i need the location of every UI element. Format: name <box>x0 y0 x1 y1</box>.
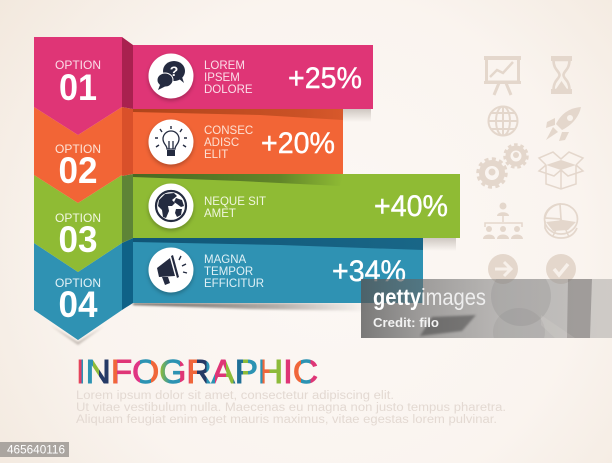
watermark credit: Credit: filo <box>373 316 439 330</box>
icon: globe <box>488 106 518 136</box>
bar 2 value: +20% <box>261 127 335 160</box>
bar 1 label: DOLORE <box>204 84 253 96</box>
option 2 label: OPTION <box>55 144 101 156</box>
icon: light bulb <box>148 120 194 164</box>
icon: rocket <box>546 107 581 141</box>
panel: option 3 arrow <box>34 174 133 272</box>
icon: megaphone <box>148 248 194 292</box>
icon: pie chart <box>544 204 578 238</box>
icon: presentation board <box>484 56 521 95</box>
panel: bar 2 orange <box>133 109 343 174</box>
panel: option 2 arrow <box>34 107 133 203</box>
bar 1 value: +25% <box>288 62 362 95</box>
icon group: faded side icons <box>478 56 583 284</box>
option 1 number: 01 <box>59 67 97 108</box>
option 3 label: OPTION <box>55 213 101 225</box>
bar 4 label: MAGNA <box>204 254 246 266</box>
bar 2 label: CONSEC <box>204 125 253 137</box>
option 2 number: 02 <box>58 150 98 191</box>
side shadows on background <box>50 109 456 345</box>
bar 4 value: +34% <box>332 255 406 288</box>
bar 4 label: TEMPOR <box>204 266 253 278</box>
bar 2 label: ELIT <box>204 149 228 161</box>
body text: Ut vitae vestibulum nulla. Maecenas eu magna non justo tempus pharetra. <box>76 402 506 414</box>
bar 2 label: ADISC <box>204 137 239 149</box>
bar 3 value: +40% <box>374 190 448 223</box>
panel: bar 3 green <box>133 174 460 238</box>
icon: arrow circle <box>488 254 518 284</box>
bar 4 label: EFFICITUR <box>204 278 264 290</box>
icon: org chart <box>483 202 523 239</box>
option 1 label: OPTION <box>55 60 101 72</box>
panel: bar 1 pink <box>133 45 373 109</box>
body text: Aliquam feugiat enim eget mauris maximus, vitae egestas lorem pulvinar. <box>76 414 497 426</box>
icon: check circle <box>546 254 576 284</box>
bar 3 label: NEQUE SIT <box>204 196 266 208</box>
body text <box>76 390 506 426</box>
icon: gears <box>478 145 527 187</box>
icon: speech bubbles: ? <box>170 63 178 79</box>
panel: option 4 arrow <box>34 238 133 340</box>
watermark logo text: gettyimages <box>373 284 486 310</box>
bar 1 label: IPSEM <box>204 72 240 84</box>
image id label: 465640116 <box>7 444 65 456</box>
icon: open box <box>539 152 583 189</box>
title: INFOGRAPHIC <box>76 353 318 390</box>
panel: bar 4 blue <box>133 238 423 303</box>
bar 1 label: LOREM <box>204 60 245 72</box>
bar 3 label: AMET <box>204 208 236 220</box>
body text: Lorem ipsum dolor sit amet, consectetur adipiscing elit. <box>76 390 394 402</box>
panel: option 1 arrow <box>34 37 133 135</box>
option 4 label: OPTION <box>55 278 101 290</box>
image id label <box>0 442 69 457</box>
option 4 number: 04 <box>58 284 98 325</box>
option 3 number: 03 <box>58 219 98 260</box>
icon: speech bubbles <box>148 54 194 98</box>
watermark: getty images <box>361 279 612 338</box>
icon: globe <box>148 184 194 228</box>
icon: hourglass <box>551 56 572 94</box>
